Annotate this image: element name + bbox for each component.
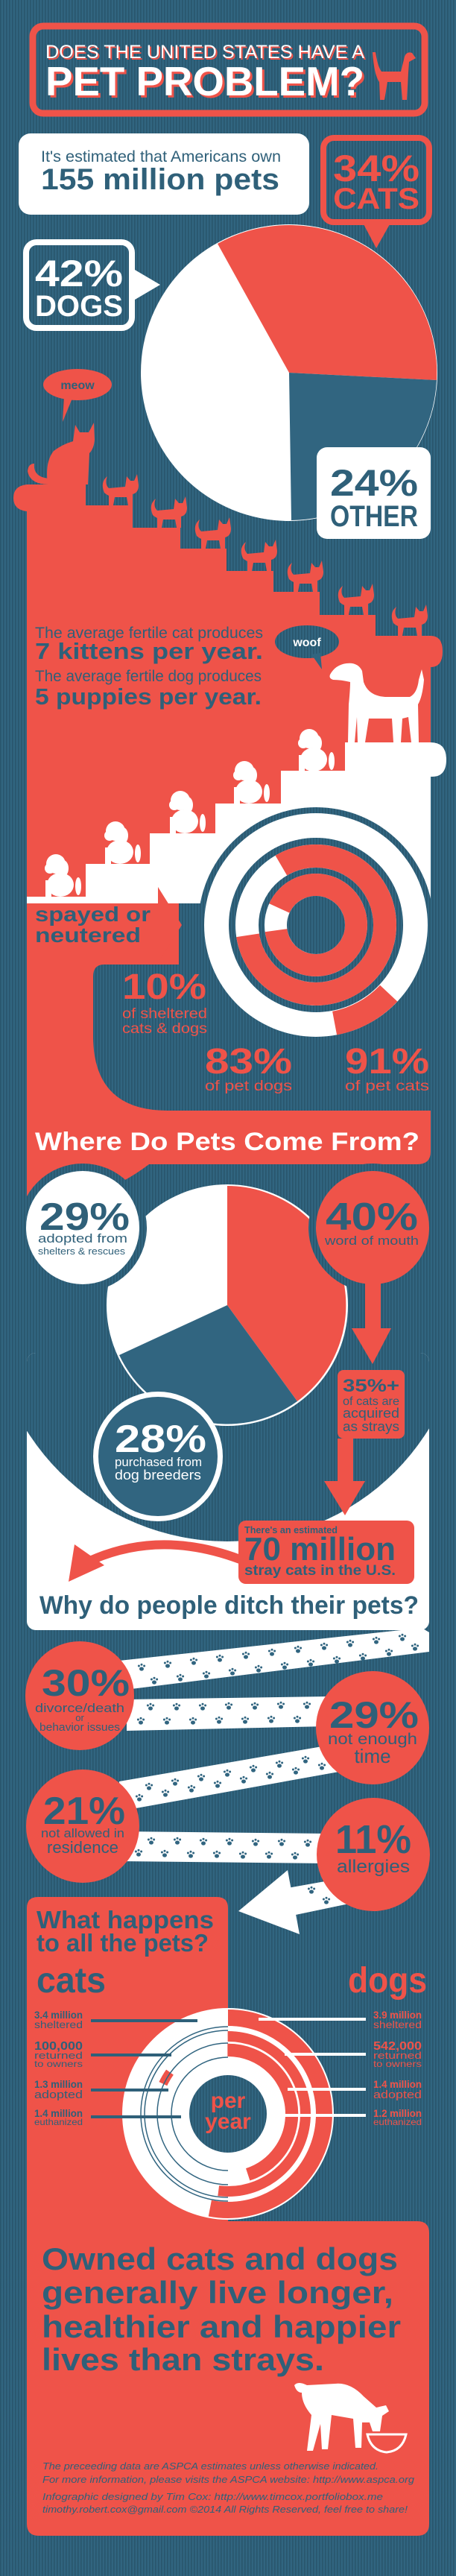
- callout: 28% breeders: dog breeders: [115, 1468, 201, 1483]
- icon: standing dog: [329, 663, 424, 742]
- stats: spay/neuter percentages: [122, 967, 429, 1094]
- dogs stats labels: [259, 2009, 422, 2127]
- arrow: spayed or neutered: [27, 887, 182, 963]
- arrow: spayed or neutered: neutered: [35, 924, 141, 947]
- callout: 155 million pets: It's estimated that Americans own: [41, 148, 281, 165]
- callout: 42% dogs: DOGS: [35, 290, 123, 323]
- stats: spay/neuter percentages: of pet dogs: [205, 1079, 292, 1094]
- callout: 29% adopted: shelters & rescues: [38, 1246, 126, 1257]
- ring chart: per year: year: [205, 2109, 251, 2134]
- callout: 40% word of mouth: 40%: [326, 1196, 418, 1239]
- callout: 155 million pets: 155 million pets: [41, 163, 279, 196]
- callout: 21% not allowed: [26, 1770, 139, 1883]
- speech bubble: meow: [43, 369, 112, 422]
- stats: spay/neuter percentages: 83%: [205, 1042, 292, 1082]
- callout: 28% breeders: [93, 1392, 223, 1521]
- speech bubble: meow: meow: [60, 379, 95, 392]
- callout: 28% breeders: purchased from: [115, 1455, 202, 1469]
- text: kittens and puppies per year: The average fertile dog produces: [35, 668, 262, 685]
- footer credits: For more information, please visits the ASPCA website: http://www.aspca.org: [42, 2474, 415, 2485]
- callout: 24% other: 24%: [330, 462, 418, 504]
- callout: 40% word of mouth: word of mouth: [324, 1234, 419, 1248]
- red bottom panel: [27, 1897, 429, 2536]
- callout: 29% adopted: adopted from: [38, 1231, 127, 1246]
- callout: 34% cats: [323, 138, 429, 248]
- label: dogs: dogs: [348, 1961, 427, 2001]
- callout: 29% adopted: [19, 1164, 147, 1292]
- callout: 30% divorce: 30%: [42, 1662, 130, 1704]
- callout: 24% other: OTHER: [330, 500, 418, 533]
- puppies on stairs: [45, 729, 335, 897]
- callout: 34% cats: 34%: [333, 148, 419, 189]
- title box: DOES THE UNITED STATES HAVE A: [47, 43, 366, 64]
- cats stats labels: to owners: [34, 2059, 83, 2069]
- arrow: down to strays: [352, 1284, 391, 1364]
- ring chart: spayed/neutered: [198, 807, 434, 1043]
- pie chart: pet ownership: [141, 224, 437, 521]
- heading: why do people ditch their pets: Why do people ditch their pets?: [39, 1591, 419, 1620]
- text: owned pets live longer: generally live longer,: [42, 2275, 393, 2310]
- cats stats labels: 100,000: [34, 2040, 83, 2053]
- ring chart: per year: [122, 2008, 334, 2220]
- heading: where do pets come from: Where Do Pets Come From?: [35, 1128, 419, 1156]
- footer credits: The preceeding data are ASPCA estimates unless otherwise indicated.: [42, 2460, 379, 2472]
- callout: 29% not enough time: time: [354, 1745, 391, 1767]
- callout: 11% allergies: [317, 1798, 430, 1911]
- callout: 30% divorce: [25, 1641, 134, 1750]
- callout: 155 million pets: [19, 133, 309, 215]
- heading: what happens to all the pets: [37, 1906, 214, 1957]
- dark circle in bowl: [27, 1353, 429, 1541]
- red stairs region: [13, 484, 443, 1200]
- cats stats labels: 1.4 million: [34, 2107, 83, 2119]
- callout: 30% divorce: divorce/death: [35, 1701, 124, 1715]
- dogs stats labels: to owners: [373, 2059, 422, 2069]
- icon: dog: [373, 52, 416, 100]
- callout: 11% allergies: allergies: [337, 1857, 410, 1877]
- stats: spay/neuter percentages: 10%: [122, 967, 206, 1007]
- footer credits: [42, 2460, 415, 2515]
- text: kittens and puppies per year: [35, 625, 263, 710]
- text: kittens and puppies per year: The average fertile cat produces: [35, 625, 263, 642]
- callout: 29% not enough time: 29%: [329, 1694, 419, 1736]
- cats stats labels: 1.3 million: [34, 2078, 83, 2090]
- text: owned pets live longer: Owned cats and dogs: [42, 2241, 398, 2276]
- callout: 40% word of mouth: [308, 1164, 437, 1292]
- arrow: big white arrowhead: [238, 1870, 300, 1934]
- dogs stats labels: sheltered: [373, 2018, 422, 2030]
- callout: 21% not allowed: 21%: [43, 1790, 125, 1833]
- title box: PET PROBLEM?: [48, 60, 367, 107]
- footer credits: Infographic designed by Tim Cox: http://www.timcox.portfoliobox.me: [42, 2491, 383, 2502]
- cats stats labels: sheltered: [34, 2018, 83, 2030]
- dogs stats labels: 542,000: [373, 2040, 422, 2053]
- callout: 29% not enough time: [316, 1671, 429, 1784]
- callout: 21% not allowed: not allowed in: [41, 1826, 124, 1840]
- callout: 30% divorce: behavior issues: [39, 1721, 120, 1734]
- dogs stats labels: 1.4 million: [373, 2078, 422, 2090]
- callout: 42% dogs: [26, 242, 160, 328]
- text: kittens and puppies per year: 7 kittens per year.: [35, 638, 263, 664]
- callout: 34% cats: CATS: [333, 183, 419, 215]
- title box: PET PROBLEM?: [45, 58, 364, 104]
- dogs stats labels: adopted: [373, 2089, 422, 2101]
- label: cats: cats: [37, 1961, 106, 2001]
- callout: 70 million strays: stray cats in the U.S.: [244, 1563, 396, 1579]
- callout: 42% dogs: 42%: [35, 253, 123, 294]
- white stairs: [27, 742, 446, 903]
- speech bubble: woof: woof: [292, 637, 321, 649]
- callout: 11% allergies: 11%: [335, 1817, 411, 1862]
- kittens on stairs: [103, 474, 428, 636]
- footer credits: timothy.robert.cox@gmail.com ©2014 All Rights Reserved, feel free to share!: [42, 2504, 408, 2515]
- cats stats labels: [34, 2009, 197, 2127]
- callout: 35% strays: acquired: [343, 1406, 399, 1421]
- dogs stats labels: returned: [373, 2050, 422, 2061]
- callout: 70 million strays: 70 million: [244, 1531, 396, 1568]
- text: kittens and puppies per year: 5 puppies per year.: [35, 684, 262, 710]
- callout: 35% strays: [338, 1370, 405, 1439]
- arrow: down to 70 million: [324, 1439, 365, 1515]
- stats: spay/neuter percentages: cats & dogs: [122, 1021, 207, 1037]
- cats stats labels: adopted: [34, 2089, 83, 2101]
- heading: what happens to all the pets: What happens: [37, 1906, 214, 1933]
- paw trail bands: [119, 1628, 429, 1934]
- callout: 29% adopted: 29%: [39, 1196, 130, 1239]
- title box: [33, 26, 425, 113]
- icon: sitting cat: [28, 423, 95, 484]
- dogs stats labels: 3.9 million: [373, 2009, 422, 2021]
- callout: 21% not allowed: residence: [47, 1838, 118, 1857]
- text: owned pets live longer: [42, 2241, 401, 2377]
- callout: 29% not enough time: not enough: [328, 1731, 417, 1748]
- title box: DOES THE UNITED STATES HAVE A: [45, 42, 364, 63]
- paw prints: [135, 1634, 419, 1904]
- dogs stats labels: 1.2 million: [373, 2107, 422, 2119]
- speech bubble: woof: [275, 625, 339, 669]
- heading: what happens to all the pets: to all the pets?: [37, 1929, 209, 1957]
- dogs stats labels: euthanized: [373, 2117, 422, 2127]
- dark cutout region: [93, 903, 431, 1111]
- callout: 35% strays: of cats are: [343, 1395, 399, 1408]
- text: owned pets live longer: healthier and happier: [42, 2309, 401, 2344]
- icon: dog eating from bowl: [294, 2383, 406, 2452]
- callout: 35% strays: 35%+: [343, 1376, 399, 1396]
- callout: 70 million strays: There's an estimated: [244, 1524, 338, 1535]
- pie chart: pet sources: [95, 1172, 360, 1438]
- callout: 30% divorce: or: [75, 1712, 84, 1723]
- callout: 35% strays: as strays: [343, 1419, 399, 1434]
- stats: spay/neuter percentages: of pet cats: [345, 1079, 429, 1094]
- curved arrow: to why section: [69, 1544, 240, 1582]
- cats stats labels: euthanized: [34, 2117, 83, 2127]
- cats stats labels: returned: [34, 2050, 83, 2061]
- callout: 70 million strays: [238, 1521, 414, 1584]
- white bowl panel: [27, 1353, 429, 1630]
- arrow: spayed or neutered: spayed or: [35, 903, 151, 926]
- callout: 24% other: [317, 447, 431, 539]
- callout: 28% breeders: 28%: [115, 1418, 206, 1461]
- text: owned pets live longer: lives than strays.: [42, 2342, 324, 2377]
- stats: spay/neuter percentages: of sheltered: [122, 1006, 207, 1022]
- stats: spay/neuter percentages: 91%: [345, 1042, 429, 1082]
- cats stats labels: 3.4 million: [34, 2009, 83, 2021]
- ring chart: per year: per: [211, 2089, 246, 2113]
